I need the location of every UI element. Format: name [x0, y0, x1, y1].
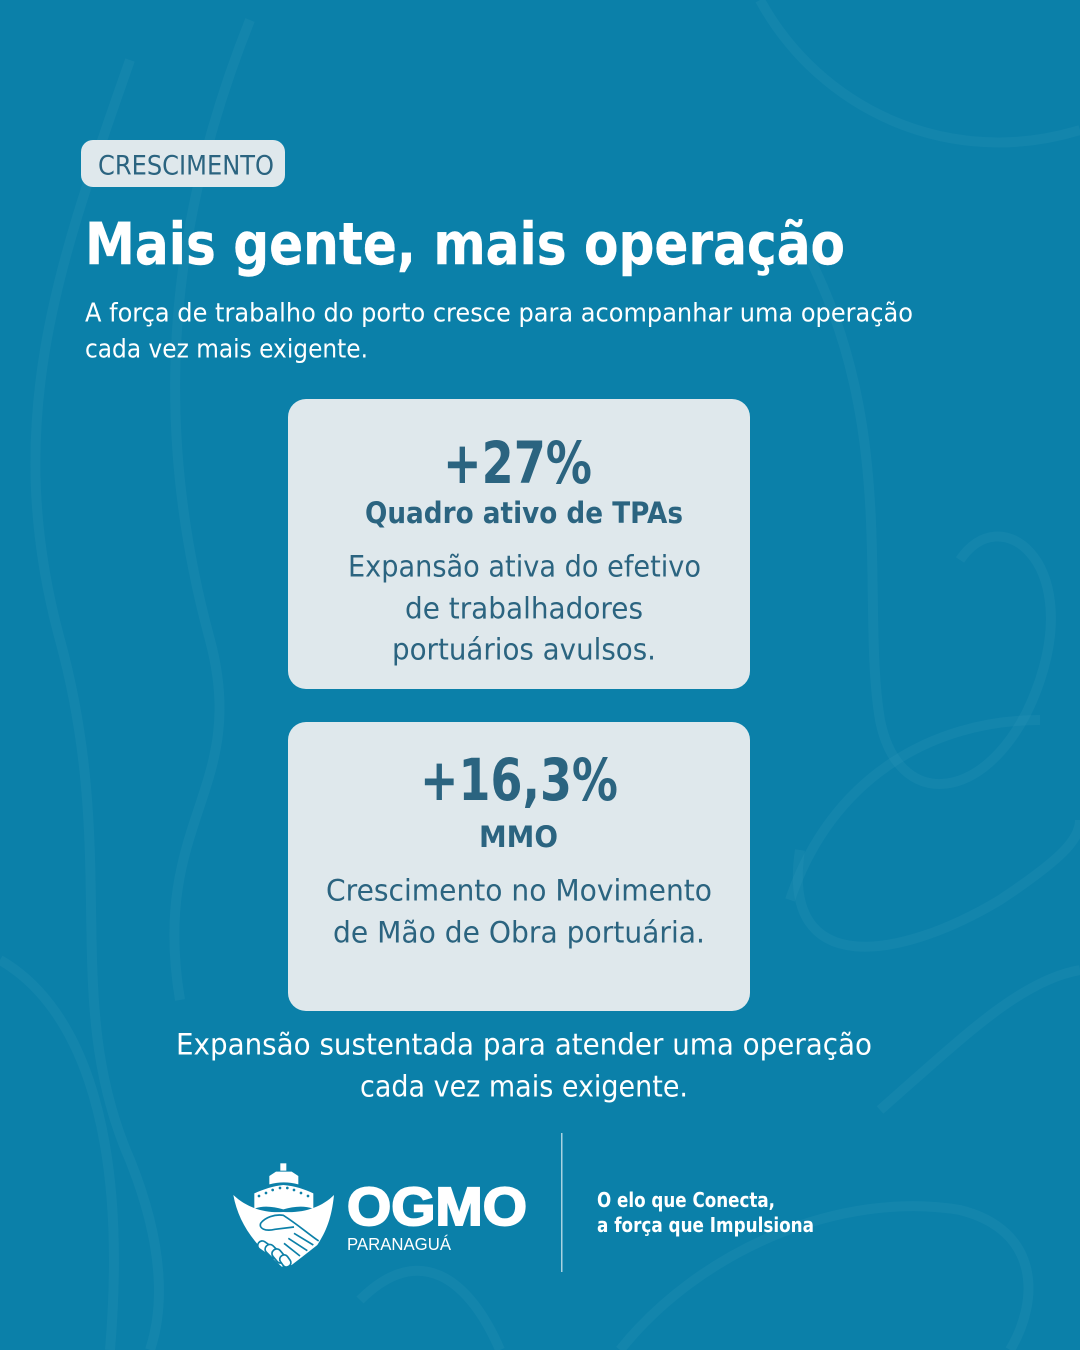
title: Mais gente, mais operação [85, 210, 845, 278]
closing statement: Expansão sustentada para atender uma operação [176, 1028, 872, 1062]
logo: OGMO Paranaguá [233, 1163, 527, 1269]
card heading: MMO: MMO [479, 820, 558, 854]
panel: MMO card [288, 722, 750, 1011]
card description: TPAs: Expansão ativa do efetivo [348, 550, 701, 584]
tagline: a força que Impulsiona [597, 1213, 814, 1237]
closing statement: cada vez mais exigente. [360, 1070, 688, 1104]
closing statement [176, 1028, 872, 1104]
card description: MMO [326, 874, 712, 950]
card description: TPAs [348, 550, 701, 666]
stat: +27%: +27% [443, 429, 592, 497]
card description: TPAs: de trabalhadores [405, 592, 643, 626]
tag: CRESCIMENTO: CRESCIMENTO [98, 150, 274, 182]
card description: MMO: de Mão de Obra portuária. [333, 916, 705, 950]
stat: +16,3%: +16,3% [420, 746, 618, 814]
subtitle: A força de trabalho do porto cresce para acompanhar uma operação [85, 298, 913, 328]
tagline [597, 1188, 814, 1237]
divider [561, 1133, 562, 1272]
subtitle: cada vez mais exigente. [85, 334, 368, 364]
wordmark: OGMO: OGMO [347, 1177, 527, 1237]
subtitle [85, 298, 913, 364]
tag: CRESCIMENTO [81, 140, 285, 187]
card heading: TPAs: Quadro ativo de TPAs [365, 496, 683, 530]
wordmark: Paranaguá: PARANAGUÁ [347, 1234, 451, 1254]
card description: MMO: Crescimento no Movimento [326, 874, 712, 908]
panel: TPA card [288, 399, 750, 689]
card description: TPAs: portuários avulsos. [392, 632, 656, 666]
hand outline [260, 1215, 319, 1256]
icon: ship and handshake [233, 1163, 334, 1269]
tagline: O elo que Conecta, [597, 1188, 775, 1212]
